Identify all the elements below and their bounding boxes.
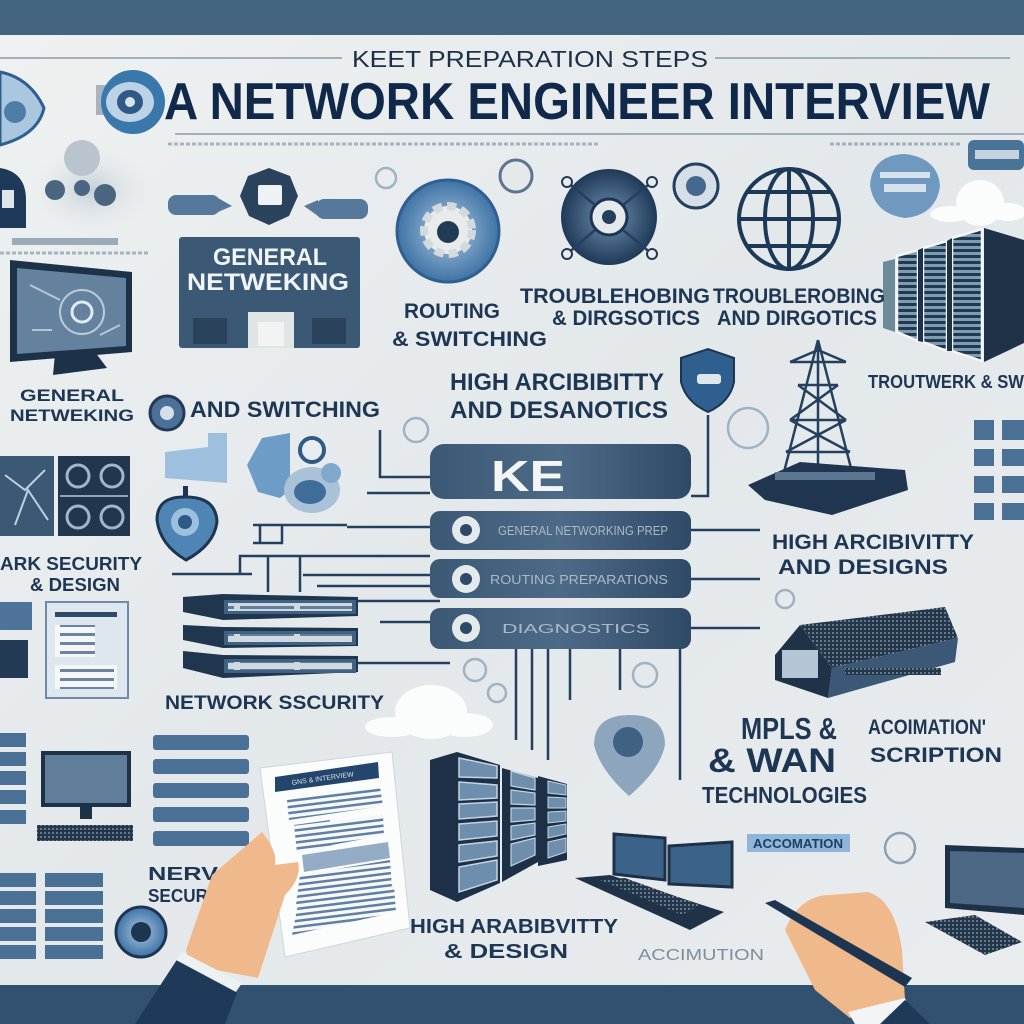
icon: blue gear bbox=[397, 180, 499, 282]
text: MPLS and WAN technologies: & WAN bbox=[708, 742, 836, 780]
icon: map panels bbox=[0, 456, 130, 536]
text: network security lower: NERV bbox=[148, 864, 218, 884]
icon: left hand with sleeve bbox=[135, 832, 299, 1024]
icon: monitor bbox=[10, 260, 132, 375]
text: high availability: AND DESANOTICS bbox=[450, 397, 668, 424]
icon: location pin globe bbox=[594, 715, 665, 796]
text: MPLS and WAN technologies: MPLS & bbox=[741, 711, 837, 746]
icon: top centre dark hexagon with tags bbox=[168, 168, 368, 225]
icon: blue shield pendant bbox=[157, 486, 217, 560]
icon: left server column bbox=[0, 733, 103, 959]
text: automation faint: ACCIMUTION bbox=[638, 947, 764, 964]
panel: document left bbox=[0, 602, 128, 698]
panel: general networking header: NETWEKING bbox=[187, 269, 349, 296]
document held in hand bbox=[260, 752, 410, 957]
icon: centre cloud bbox=[365, 685, 493, 739]
label: automation pill: ACCOMATION bbox=[753, 836, 843, 851]
text: network security: NETWORK SSCURITY bbox=[165, 693, 384, 714]
icon: stacked switches bbox=[183, 594, 358, 678]
pill: row three bbox=[430, 608, 691, 649]
icon: right monitor bbox=[925, 845, 1024, 955]
icon: lower-left gear bbox=[116, 907, 166, 957]
text: general networking: NETWEKING bbox=[10, 406, 134, 425]
icon: network appliance bbox=[775, 607, 958, 698]
text: MPLS and WAN technologies: TECHNOLOGIES bbox=[702, 782, 867, 808]
text: troubleshooting two: TROUBLEROBING bbox=[713, 285, 885, 308]
pill: KE header bbox=[430, 444, 691, 501]
text: high availability and designs right: AND DESIGNS bbox=[778, 556, 948, 579]
panel: general networking header bbox=[179, 237, 360, 348]
icon: centre-left blue graphics bbox=[165, 433, 341, 513]
text: security and design left: ARK SECURITY bbox=[0, 554, 142, 574]
text: routing and switching: & SWITCHING bbox=[392, 328, 547, 351]
text: network security lower: SECUR bbox=[148, 886, 208, 906]
text: and switching: AND SWITCHING bbox=[190, 397, 380, 422]
icon: right hand with pen bbox=[765, 892, 930, 1024]
header rules bbox=[0, 58, 1024, 253]
text: high availability: HIGH ARCIBIBITTY bbox=[450, 369, 664, 396]
icon: network hub bbox=[561, 169, 657, 265]
panel: general networking header: GENERAL bbox=[213, 244, 327, 271]
text: troubleshooting one: TROUBLEHOBING bbox=[520, 285, 710, 308]
text: routing and switching: ROUTING bbox=[404, 300, 500, 323]
icon: shield badge small bbox=[150, 396, 184, 430]
title block: KEET PREPARATION STEPS bbox=[352, 46, 708, 72]
icon: small monitor left bbox=[37, 751, 133, 841]
icon: list bars bbox=[153, 735, 249, 846]
text: troubleshooting two: AND DIRGOTICS bbox=[717, 307, 877, 330]
icon: small scattered badges bbox=[376, 168, 794, 702]
icon: desk workstations bbox=[575, 834, 732, 930]
text: high availability design bottom: HIGH ARABIBVITTY bbox=[410, 916, 619, 938]
connector lines bbox=[172, 415, 760, 780]
icon: small circular arrow bbox=[885, 833, 915, 863]
text: automation scripting: SCRIPTION bbox=[870, 744, 1002, 767]
icon: small target badge bbox=[500, 160, 718, 208]
text: general networking: GENERAL bbox=[20, 386, 124, 405]
icon: top-left graphics bbox=[0, 70, 165, 245]
text: automation scripting: ACOIMATION' bbox=[868, 716, 986, 739]
text: high availability and designs right: HIGH ARCIBIVITTY bbox=[772, 531, 974, 554]
text: security and design left: & DESIGN bbox=[30, 575, 120, 595]
pill: KE header: KE bbox=[491, 452, 565, 501]
pill: row three: DIAGNOSTICS bbox=[502, 621, 651, 636]
bottom band bbox=[0, 986, 1024, 1024]
text: troubleshooting one: & DIRGSOTICS bbox=[552, 307, 700, 330]
icon: globe bbox=[739, 169, 839, 269]
text: high availability design bottom: & DESIGN bbox=[444, 941, 568, 963]
icon: small server list right bbox=[974, 420, 1024, 520]
icon: top-right badge and cloud bbox=[870, 140, 1024, 226]
pill: row two bbox=[430, 559, 691, 598]
icon: transmission tower bbox=[748, 340, 908, 515]
icon: server racks top right bbox=[883, 228, 1024, 362]
title block bbox=[164, 46, 991, 131]
icon: shield bbox=[681, 349, 734, 412]
pill: row one bbox=[430, 511, 691, 550]
document held in hand: GNS & INTERVIEW bbox=[291, 771, 355, 787]
icon: central server racks bbox=[430, 752, 567, 902]
pill: row one: GENERAL NETWORKING PREP bbox=[498, 523, 668, 538]
pill: row two: ROUTING PREPARATIONS bbox=[490, 572, 668, 587]
